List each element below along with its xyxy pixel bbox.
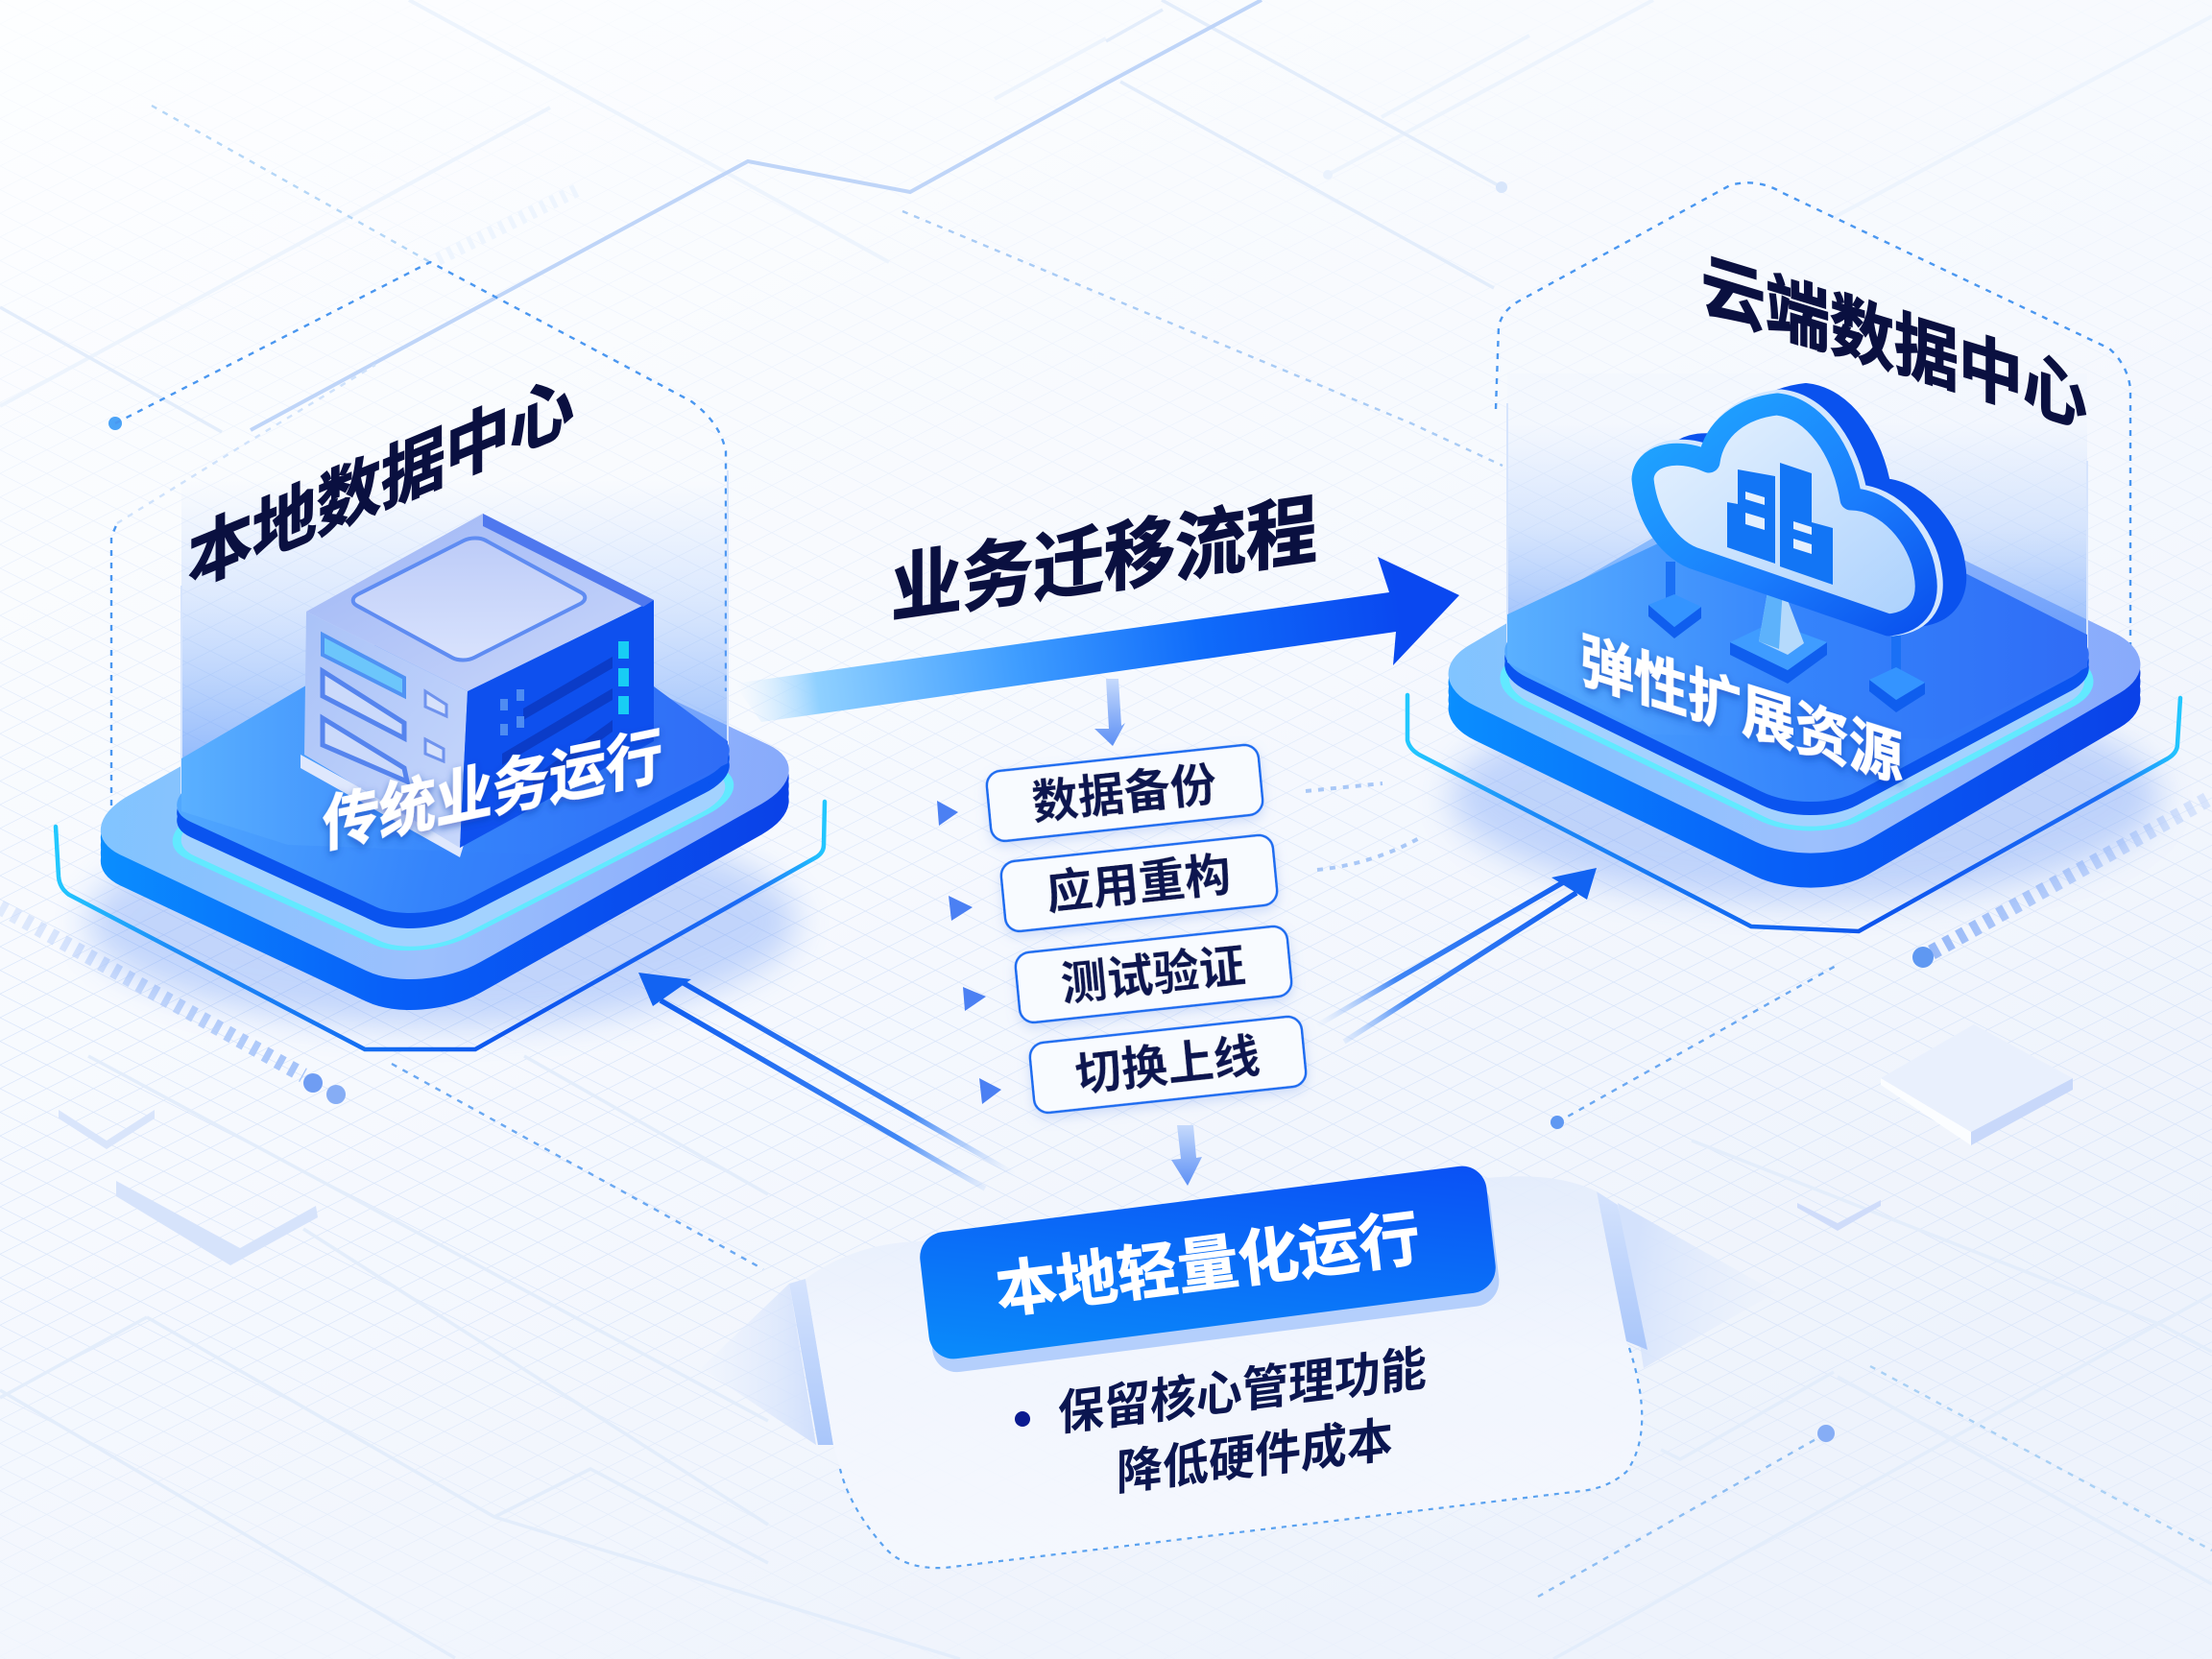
bullet text: 降低硬件成本 (1117, 1413, 1393, 1501)
platform shadow (86, 816, 797, 1027)
step: data backup: 数据备份 (1030, 758, 1219, 830)
label: traditional business: 传统业务运行 (323, 722, 662, 860)
cloud body (1671, 395, 1955, 615)
panel: local data center (56, 262, 825, 1049)
step: test (1014, 925, 1293, 1023)
inner base with glow ring (151, 592, 756, 961)
label: lightweight operation (917, 1163, 1502, 1375)
tick strip top (438, 189, 579, 259)
step: test: 测试验证 (1059, 940, 1248, 1011)
panel: local lightweight operation (701, 1163, 1776, 1568)
step markers (937, 801, 1001, 1104)
panel: cloud data center (1407, 182, 2180, 931)
platform (1415, 468, 2174, 905)
dashed outline (111, 262, 726, 818)
step: app refactor: 应用重构 (1045, 849, 1234, 920)
floor bracket (1407, 695, 2180, 931)
main arrow: migration flow (733, 557, 1459, 722)
inner base with glow ring (1477, 480, 2117, 843)
stands (1648, 562, 1925, 712)
arrow: return to local (638, 973, 1018, 1189)
glass dome (181, 451, 728, 811)
platform shadow (1450, 691, 2160, 902)
icon: cloud with buildings (1643, 395, 1955, 712)
icon: server (301, 514, 654, 857)
arrow: flow to steps (1094, 679, 1125, 746)
buildings (1727, 463, 1833, 585)
heading: migration process: 业务迁移流程 (891, 489, 1317, 633)
step: app refactor (999, 833, 1279, 932)
step: go live: 切换上线 (1073, 1030, 1262, 1101)
label: elastic scaling: 弹性扩展资源 (1580, 627, 1903, 793)
panel: migration steps (937, 743, 1308, 1114)
step: data backup (985, 743, 1264, 842)
arrow: steps to lightweight (1171, 1125, 1202, 1186)
dotted arcs (1306, 783, 1421, 870)
title: local data center: 本地数据中心 (188, 365, 574, 602)
bullet (1015, 1411, 1030, 1427)
dashed outline (1496, 182, 2130, 660)
tick strip right (1932, 797, 2212, 952)
arrow: to cloud (1317, 868, 1597, 1042)
panel body (805, 1176, 1644, 1568)
bullet text (1058, 1341, 1427, 1501)
panel wings (701, 1203, 1776, 1445)
right strip (1597, 1191, 1647, 1350)
decorative slabs (59, 1024, 2073, 1265)
title: cloud data center: 云端数据中心 (1701, 246, 2087, 442)
decorative dots (108, 170, 1934, 1442)
glass dome (1507, 373, 2087, 672)
floor bracket (56, 802, 825, 1049)
bullet text: 保留核心管理功能 (1058, 1341, 1427, 1441)
label: lightweight operation: 本地轻量化运行 (993, 1205, 1424, 1326)
platform (68, 604, 822, 1027)
step: go live (1028, 1015, 1308, 1114)
tick strip left (0, 907, 303, 1075)
